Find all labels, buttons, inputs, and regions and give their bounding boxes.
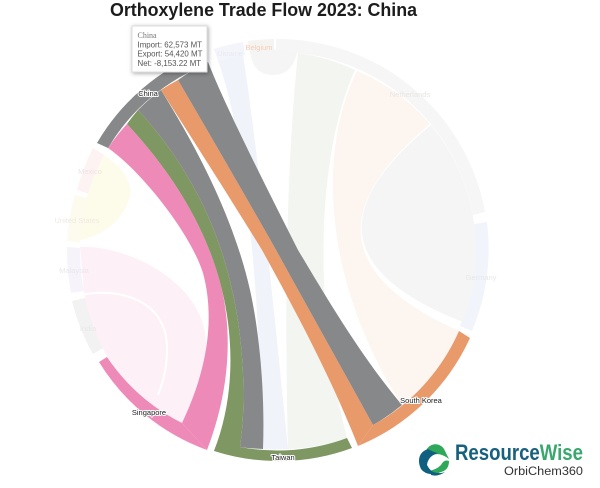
country labels: South Korea [400, 396, 443, 405]
faded country labels: India [80, 324, 97, 333]
tooltip: Export: 54,420 MT [138, 50, 203, 58]
country labels: China [138, 89, 159, 98]
logo wordmark: ResourceWise [455, 440, 583, 465]
faded country labels: Belgium [245, 43, 273, 52]
faded country labels: United States [54, 216, 100, 225]
tooltip: Import: 62,573 MT [138, 40, 202, 50]
arc: Singapore [99, 357, 207, 450]
faded country labels: Germany [466, 273, 497, 282]
country labels [132, 89, 443, 462]
arc: China [97, 52, 208, 148]
ribbon: China to Singapore [108, 124, 228, 450]
country labels: Singapore [132, 408, 166, 417]
faded country labels: Mexico [78, 167, 102, 176]
faded country labels [54, 43, 497, 333]
faded country arcs [67, 39, 489, 354]
chord diagram [67, 39, 489, 461]
arc: South Korea [358, 331, 470, 446]
faded country labels: Netherlands [390, 90, 430, 99]
faded country labels: Malaysia [59, 266, 90, 275]
ribbon: China to Taiwan (grey) [138, 90, 263, 449]
ribbon: China to South Korea (grey) [178, 62, 402, 425]
faded ribbons [80, 49, 476, 449]
arc: Taiwan [214, 438, 352, 461]
logo: ResourceWise OrbiChem360 [419, 440, 583, 478]
tooltip [132, 26, 207, 72]
country labels: Taiwan [271, 453, 295, 462]
logo icon [419, 444, 449, 476]
ribbon: China to South Korea (orange) [161, 80, 373, 446]
faded country labels: Ukraine [217, 49, 243, 58]
tooltip: Net: -8,153.22 MT [138, 59, 201, 68]
logo sub-brand: OrbiChem360 [504, 466, 583, 478]
tooltip: China [138, 31, 157, 40]
ribbon: China to Taiwan (green) [127, 110, 243, 451]
